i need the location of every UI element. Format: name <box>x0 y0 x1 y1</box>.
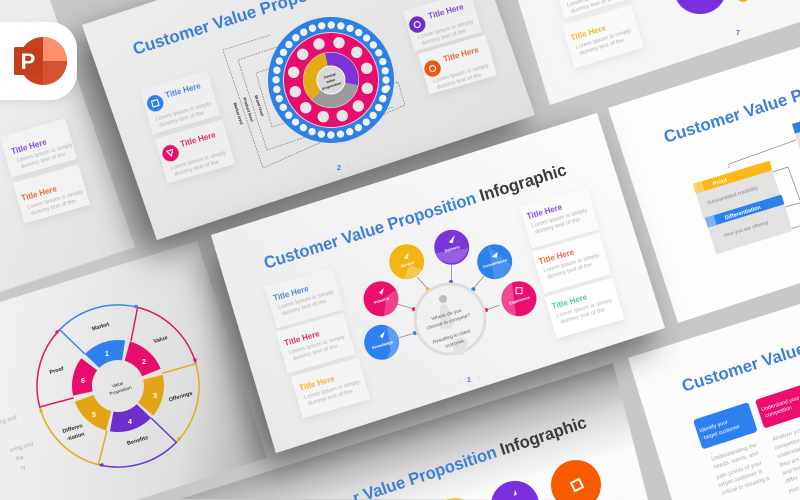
page number 1 <box>458 375 480 386</box>
pink ring dots <box>288 37 373 122</box>
text card: blue title: Title Here <box>272 284 310 303</box>
panel: far-left slide <box>0 0 135 292</box>
text card: purple title: Title Here <box>526 202 564 221</box>
column: understand competition <box>755 381 800 495</box>
petal: convenience: Convenience <box>482 257 509 269</box>
text card: pink with icon: Lorem Ipsum is simply <box>170 150 227 172</box>
faint body text <box>0 413 40 474</box>
panel: bottom-centre slide <box>180 363 648 500</box>
flow box: top right <box>792 112 800 160</box>
text card: purple title: dummy text of the <box>20 152 66 170</box>
flow box: differentiation: Differentiation <box>724 205 762 222</box>
wheel numbers: 5 <box>92 412 96 419</box>
text card: orange title <box>13 164 90 223</box>
pink header card <box>755 381 800 429</box>
body text <box>711 443 771 497</box>
wheel numbers: 2 <box>142 359 146 366</box>
petal: knowledge: Knowledge <box>371 339 394 350</box>
text card: orange with icon: dummy text of the <box>436 72 482 91</box>
central hub: Where do you <box>431 308 463 322</box>
text card: pink with icon: Title Here <box>179 130 217 149</box>
wheel labels <box>49 322 193 447</box>
text card: purple title: Lorem Ipsum is simply <box>531 208 588 229</box>
body text: Understanding the <box>711 443 758 463</box>
central hub: choose to compete? <box>426 313 471 331</box>
body text: critical to creating a <box>721 476 771 497</box>
text card: green title: dummy text of the <box>560 307 606 326</box>
panel: main slide <box>211 113 665 453</box>
blue header card: target customer <box>703 424 741 441</box>
big purple circle <box>673 0 727 14</box>
heading: Customer Value Proposition Infographic <box>262 160 569 273</box>
orange circle icon <box>551 460 601 500</box>
text card: pink with icon <box>155 120 235 183</box>
wheel outer arcs and spokes <box>37 305 199 467</box>
wheel labels: Differen <box>62 423 84 435</box>
wheel numbers: 6 <box>81 378 85 385</box>
level labels: Market level <box>233 102 244 125</box>
connector lines <box>729 140 800 240</box>
white callout dots <box>376 85 390 111</box>
pink header card: Understand your <box>761 395 800 413</box>
level labels: Brand level <box>254 95 265 117</box>
wheel labels: Offerings <box>168 391 193 403</box>
text card: purple with icon: Title Here <box>427 2 465 21</box>
central hub: Central <box>323 72 336 80</box>
text card: blue with icon <box>140 71 220 134</box>
faint body text: the <box>15 455 25 463</box>
text card: yellow title: Title Here <box>298 374 336 393</box>
text card: purple with icon: Lorem Ipsum is simply <box>417 19 474 41</box>
level labels: Product level <box>242 97 255 122</box>
inner segments <box>310 59 352 101</box>
text card: orange with icon: Title Here <box>442 45 480 64</box>
level labels <box>233 95 265 125</box>
petal: knowledge <box>364 325 400 360</box>
petal: service <box>389 244 424 279</box>
text card: pink with icon: dummy text of the <box>174 159 220 178</box>
flow box: proof: Proof <box>712 178 728 188</box>
icon: PowerPoint app badge <box>0 22 77 100</box>
spoke end dots <box>412 280 488 335</box>
outer blue ring <box>268 17 394 143</box>
petal: experience <box>502 281 536 316</box>
text card: blue with icon: Lorem Ipsum is simply <box>155 101 212 123</box>
text card: yellow title <box>291 358 370 418</box>
text card: purple title <box>520 188 599 248</box>
wheel inner band <box>82 350 154 422</box>
blue header card: Identify your <box>699 419 729 434</box>
text card: blue with icon: Title Here <box>164 81 202 100</box>
panel: cycle wheel slide <box>0 241 267 500</box>
body text: needs, wants, and <box>713 451 759 471</box>
panel: lower-right columns slide <box>628 304 800 500</box>
petal: convenience <box>477 244 512 279</box>
central hub: proposition <box>322 81 342 91</box>
text card: purple title: Title Here <box>10 137 48 156</box>
outer ring dots <box>276 25 386 135</box>
petal: delivery <box>434 230 469 265</box>
petal: experience: Experience <box>508 294 531 306</box>
text card: upper <box>553 0 634 18</box>
page number 2: › <box>347 163 349 169</box>
text card: yellow title: dummy text of the <box>307 389 353 407</box>
concentric circle chart <box>268 17 394 143</box>
flow box: proof: Substantiated credibility <box>706 185 759 207</box>
wheel arrow heads <box>39 305 197 467</box>
text card: orange with icon <box>418 35 497 94</box>
pink ring <box>284 32 378 128</box>
dashed level boxes <box>223 35 405 168</box>
wheel labels: Value <box>153 335 168 345</box>
wheel numbers: 1 <box>105 351 109 358</box>
text card: purple title: Lorem Ipsum is simply <box>17 142 74 164</box>
yellow circle <box>737 0 749 2</box>
text card: orange title: Title Here <box>20 184 58 203</box>
page number 1: 1 <box>467 377 471 384</box>
text card: green title: Lorem Ipsum is simply <box>556 298 613 319</box>
page number 1: ‹ <box>458 380 460 386</box>
page number 1: › <box>478 375 480 381</box>
panel: top-right slide <box>518 0 800 105</box>
flow box: proof <box>693 161 781 220</box>
central hub <box>415 284 485 355</box>
text card: yellow title <box>562 5 644 68</box>
text card: yellow title: Lorem Ipsum is simply <box>575 28 632 51</box>
text card: purple title: dummy text of the <box>535 217 581 236</box>
text card: orange title <box>532 233 611 293</box>
body text: target customer is <box>718 469 764 489</box>
flow box: differentiation <box>705 195 793 254</box>
wheel labels: Market <box>91 322 110 333</box>
wheel labels: Benefits <box>126 435 149 447</box>
wheel labels: Proposition <box>109 385 133 396</box>
text card: pink title: dummy text of the <box>292 344 338 362</box>
central hub: outcome <box>445 338 465 350</box>
page number 2 <box>327 163 349 175</box>
petal: industry <box>364 281 398 316</box>
text card: green title <box>545 278 624 338</box>
page number 2: 2 <box>337 165 341 172</box>
purple circle icon <box>492 481 538 500</box>
panel: right-centre flow slide <box>608 47 800 323</box>
body text: differ <box>785 475 799 485</box>
wheel numbers <box>81 351 157 426</box>
central hub: value <box>326 78 336 84</box>
yellow circle <box>445 498 465 500</box>
petal: delivery: Delivery <box>444 244 461 253</box>
spoke lines <box>397 265 500 338</box>
faint body text: ering and <box>10 441 34 454</box>
body text: they are <box>779 457 800 469</box>
text card: yellow title: Title Here <box>570 23 608 43</box>
text card: green title: Title Here <box>551 292 589 311</box>
petal: industry: Industry <box>373 295 390 305</box>
panel: concentric circle slide <box>82 0 535 240</box>
text card: pink title: Lorem Ipsum is simply <box>289 334 346 356</box>
text card: orange title: Lorem Ipsum is simply <box>543 253 600 274</box>
blue header card <box>693 402 758 449</box>
page number 7: 7 <box>736 30 740 37</box>
text card: blue with icon: dummy text of the <box>159 110 205 129</box>
text card: blue title: dummy text of the <box>281 299 327 317</box>
wheel labels: Proof <box>49 366 65 376</box>
text card: pink title <box>276 313 355 373</box>
icon: PowerPoint app badge: P <box>21 49 35 74</box>
body text <box>772 427 800 495</box>
text card: blue title: Lorem Ipsum is simply <box>278 289 335 311</box>
body text: your <box>788 486 800 495</box>
text card: orange with icon: Lorem Ipsum is simply <box>432 63 490 85</box>
text card: orange title: Lorem Ipsum is simply <box>27 189 84 211</box>
page number 2: ‹ <box>327 169 329 175</box>
text card: orange title: dummy text of the <box>547 262 593 281</box>
column: identify customer <box>693 402 771 497</box>
text card: blue title <box>265 268 344 328</box>
wheel numbers: 3 <box>153 393 157 400</box>
text card: purple with icon: dummy text of the <box>421 29 467 47</box>
pink header card: competition <box>765 405 793 419</box>
text card: orange title: Title Here <box>538 247 576 266</box>
wheel numbers: 4 <box>128 419 132 426</box>
text card: yellow title: dummy text of the <box>579 38 625 57</box>
text card: pink title: Title Here <box>283 329 321 348</box>
faint body text: ry <box>20 465 27 472</box>
body text: pain points of your <box>716 461 763 481</box>
text card: purple title <box>0 118 77 177</box>
wheel labels: -tiation <box>66 431 86 443</box>
text card: orange title: dummy text of the <box>30 199 76 217</box>
central hub: Resulting in client <box>432 328 472 346</box>
central hub <box>317 66 345 94</box>
wheel labels: Value <box>111 380 124 389</box>
text card: yellow title: Lorem Ipsum is simply <box>304 379 361 401</box>
flow box: differentiation: How you are offering <box>723 220 769 239</box>
petal: service: Service <box>400 259 416 269</box>
text card: purple with icon <box>403 0 482 51</box>
